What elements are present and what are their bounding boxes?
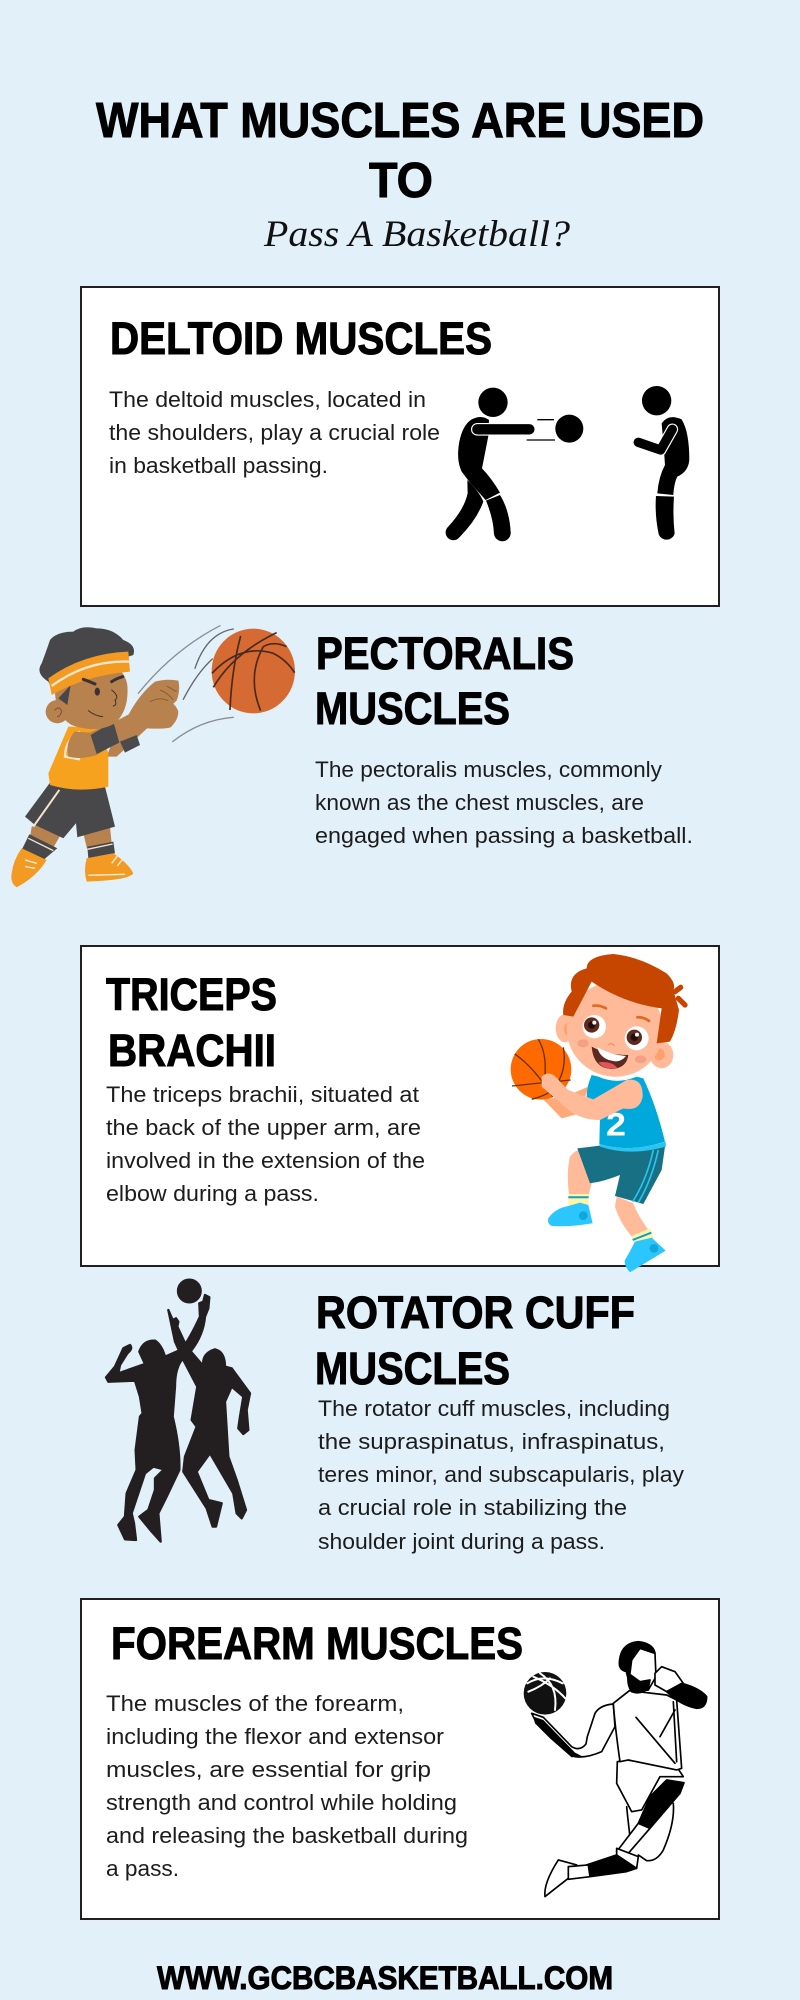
text: forearm description: The muscles of the forearm, (106, 1691, 404, 1716)
raised forearm (655, 1667, 683, 1692)
near arm (67, 701, 178, 758)
face (55, 677, 123, 717)
footer: website: WWW.GCBCBASKETBALL.COM (157, 1960, 613, 1996)
hair (563, 954, 679, 1043)
text: pectoralis description: known as the chest muscles, are (315, 790, 644, 815)
illustration: line drawing of a player with a ball (524, 1642, 707, 1897)
shoe (545, 1860, 577, 1897)
shoes (548, 1203, 593, 1226)
far arm (543, 1087, 588, 1118)
text: pectoralis description: The pectoralis muscles, commonly (315, 757, 663, 782)
near arm (542, 1073, 643, 1120)
heading: triceps brachii: BRACHII (108, 1025, 276, 1076)
text: rotator cuff description: teres minor, and subscapularis, play (318, 1462, 685, 1487)
heading: deltoid muscles: DELTOID MUSCLES (110, 313, 492, 364)
title: WHAT MUSCLES ARE USED (96, 94, 704, 148)
ball (524, 1672, 566, 1715)
heading: rotator cuff muscles (315, 1287, 635, 1394)
subtitle: Pass A Basketball? (263, 214, 571, 255)
heading: pectoralis muscles: PECTORALIS (316, 628, 574, 679)
panel: deltoid muscles (81, 287, 719, 606)
text: deltoid description: in basketball passing. (109, 453, 328, 478)
far arm and hand (107, 680, 179, 757)
heading: rotator cuff muscles: ROTATOR CUFF (316, 1287, 635, 1338)
illustration: boy in headband passing a basketball (11, 626, 295, 887)
text: pectoralis description: engaged when passing a basketball. (315, 823, 693, 848)
jersey (587, 1075, 665, 1148)
heading: forearm muscles: FOREARM MUSCLES (111, 1618, 523, 1669)
heading: triceps brachii (106, 969, 277, 1076)
jersey number: 2 (606, 1106, 626, 1142)
motion lines (138, 626, 233, 742)
socks (568, 1194, 589, 1207)
knee pad (638, 1780, 684, 1828)
face (577, 1006, 649, 1069)
illustration: cartoon boy holding a basketball (511, 954, 685, 1272)
headband (48, 652, 130, 695)
shorts (617, 1760, 683, 1812)
ball arm (532, 1704, 615, 1757)
icon: two stick figures passing a ball (446, 386, 689, 541)
text: forearm description: a pass. (106, 1856, 179, 1881)
text: triceps description: elbow during a pass. (106, 1181, 319, 1206)
shorts (25, 783, 115, 838)
text: deltoid description: the shoulders, play a crucial role (109, 420, 440, 445)
text: forearm description (106, 1691, 468, 1881)
head (556, 971, 674, 1088)
text: forearm description: including the flexor and extensor (106, 1724, 445, 1749)
text: forearm description: strength and control while holding (106, 1790, 457, 1815)
text: rotator cuff description (318, 1396, 685, 1554)
jersey (613, 1691, 682, 1770)
text: triceps description: involved in the extension of the (106, 1148, 425, 1173)
legs (568, 1150, 592, 1197)
basketball (212, 629, 295, 713)
socks and shoes (22, 834, 57, 860)
text: rotator cuff description: shoulder joint during a pass. (318, 1529, 605, 1554)
text: pectoralis description (315, 757, 693, 848)
text: rotator cuff description: a crucial role in stabilizing the (318, 1495, 627, 1520)
heading: pectoralis muscles: MUSCLES (315, 683, 510, 734)
title: TO (369, 154, 433, 208)
hair (39, 627, 134, 705)
heading: rotator cuff muscles: MUSCLES (315, 1343, 510, 1394)
head (627, 1648, 656, 1692)
ears (556, 1014, 574, 1042)
rear leg (617, 1803, 674, 1861)
shorts (577, 1146, 665, 1204)
illustration: two players jumping silhouette (106, 1280, 250, 1542)
text: forearm description: and releasing the basketball during (106, 1823, 468, 1848)
title (96, 94, 704, 208)
panel: forearm muscles (81, 1599, 719, 1919)
head (46, 700, 69, 723)
basketball (511, 1039, 571, 1100)
lower leg sleeve (587, 1855, 637, 1877)
legs (28, 823, 62, 853)
heading: pectoralis muscles (315, 628, 574, 734)
text: rotator cuff description: the supraspinatus, infraspinatus, (318, 1429, 665, 1454)
text: deltoid description: The deltoid muscles, located in (109, 387, 426, 412)
text: forearm description: muscles, are essential for grip (106, 1757, 431, 1782)
text: triceps description: The triceps brachii, situated at (106, 1082, 420, 1107)
heading: triceps brachii: TRICEPS (106, 969, 277, 1020)
jersey (48, 727, 108, 790)
text: rotator cuff description: The rotator cuff muscles, including (318, 1396, 670, 1421)
text: deltoid description (109, 387, 440, 478)
panel: triceps brachii (81, 946, 719, 1272)
text: triceps description (106, 1082, 425, 1206)
text: triceps description: the back of the upper arm, are (106, 1115, 421, 1140)
